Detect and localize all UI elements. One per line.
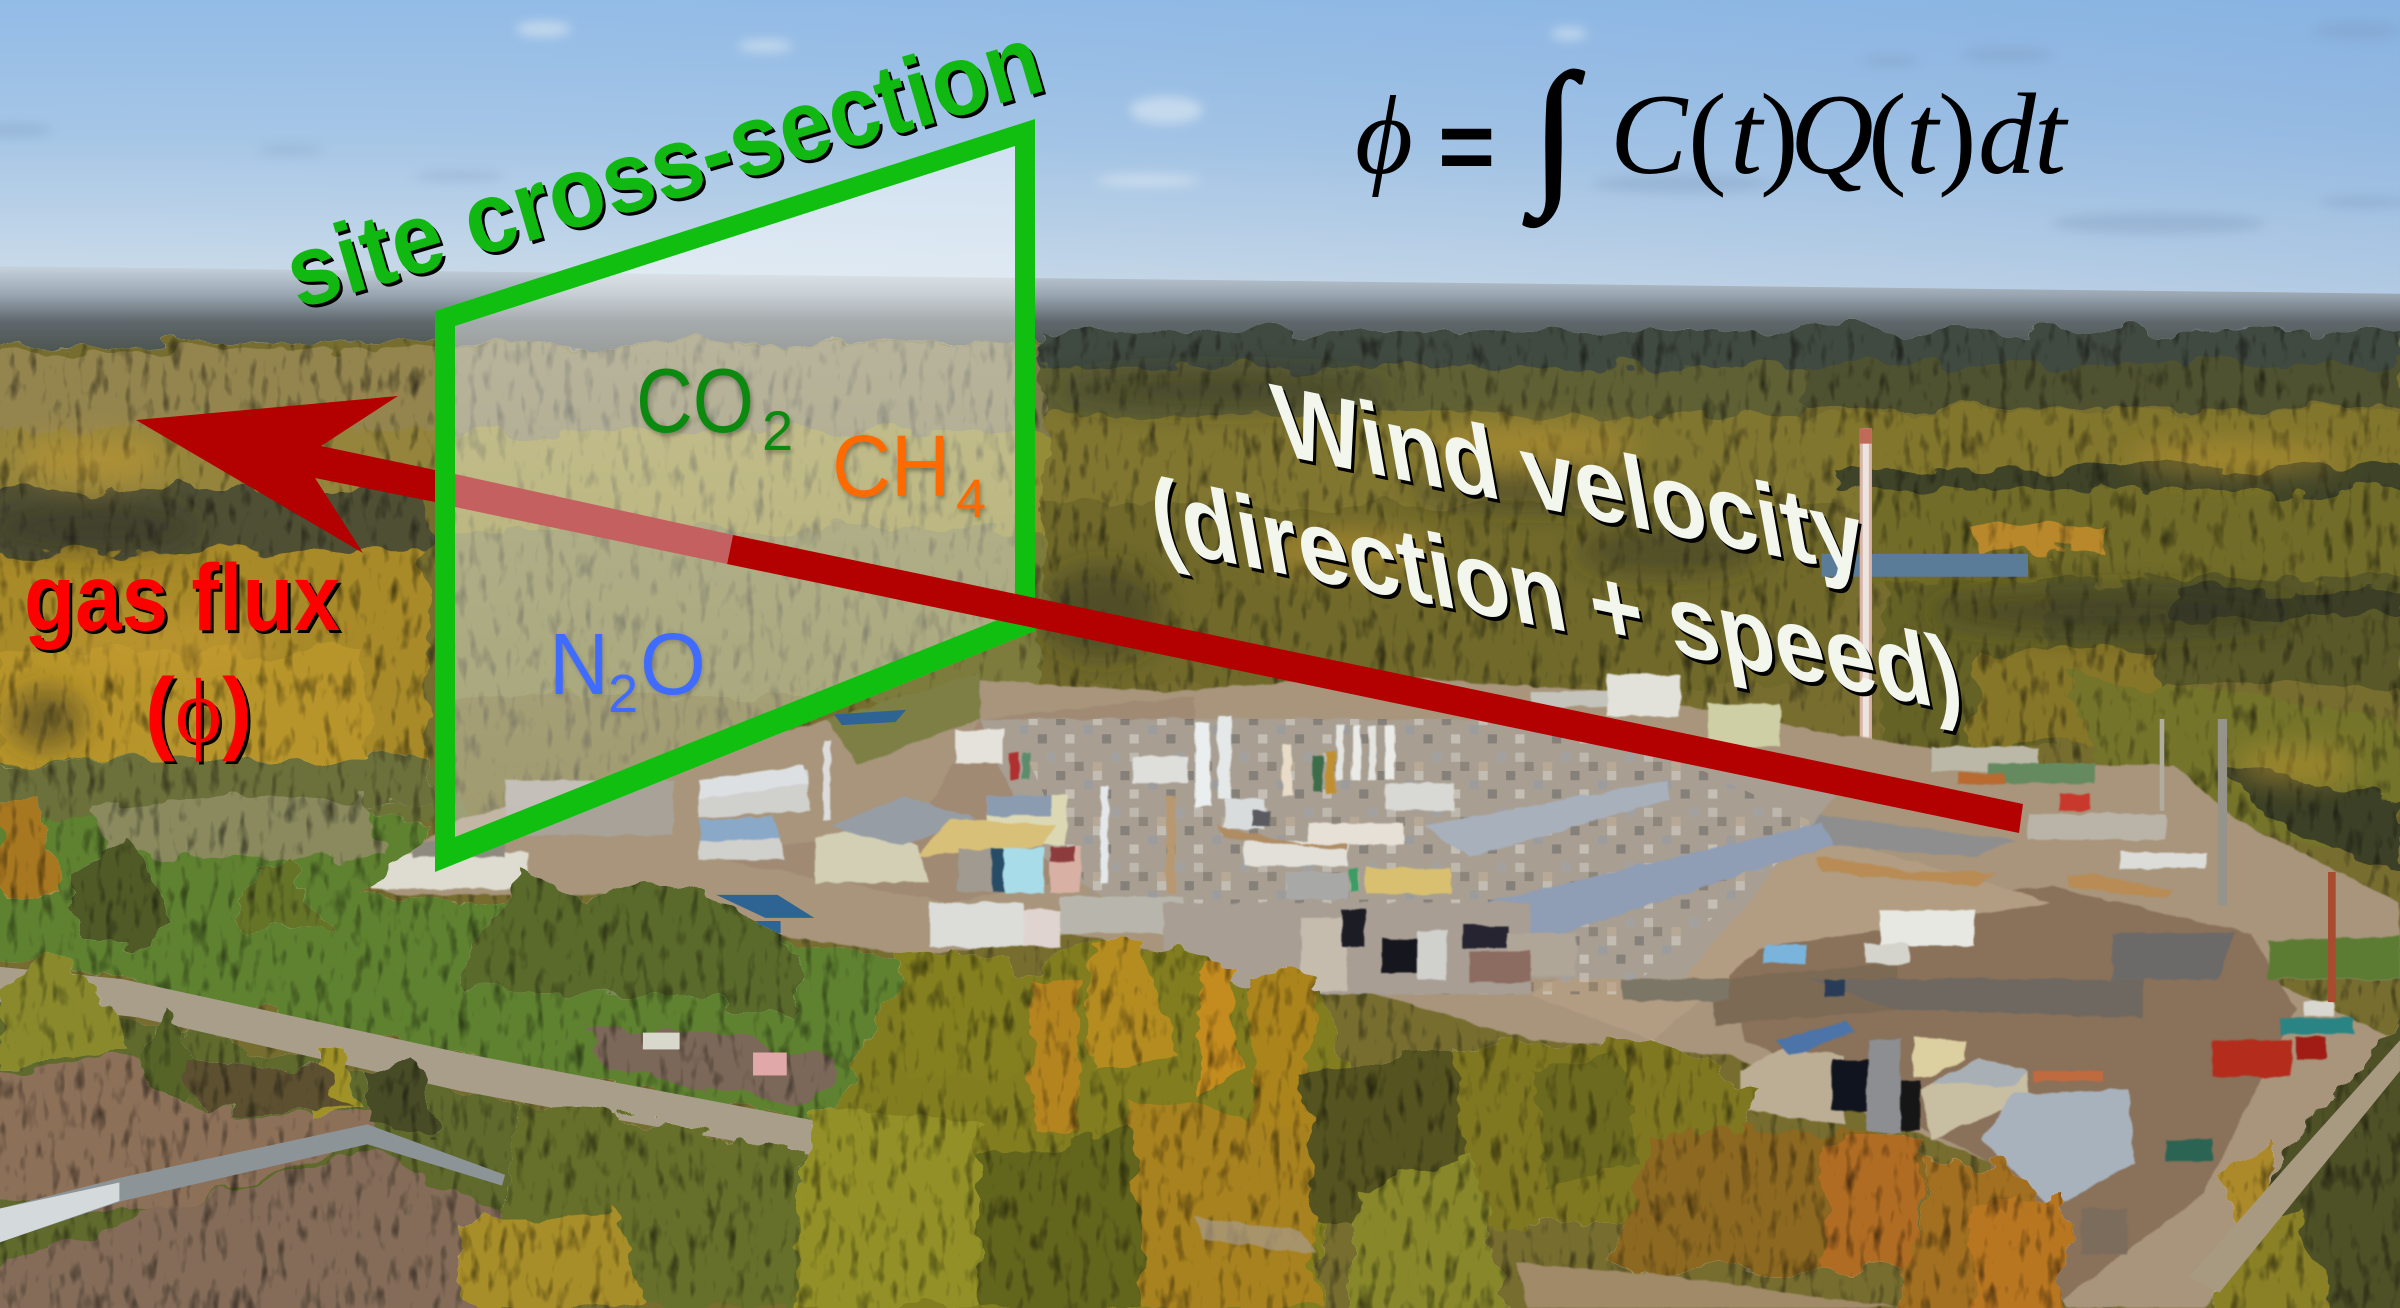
formula: ( [1688,71,1727,199]
translucent section fill [435,119,1035,872]
arrow shaft solid [727,535,2023,833]
lawn, road and dirt [0,757,937,1308]
label: wind velocity: Wind velocity [1264,361,1873,597]
ponds [716,710,906,933]
arrow shaft behind translucent section [455,474,733,564]
arrow head [136,396,435,553]
helipad markers [643,1033,787,1075]
formula: ϕ [1355,74,1413,198]
industrial site ground [360,673,2400,1308]
lower roads [1194,1216,1898,1308]
formula: d [1978,71,2037,199]
site block texture [1010,719,1821,994]
formula: ( [1868,71,1907,199]
label: CO2: CO [636,351,754,452]
label: gas flux: gas flux [24,545,340,651]
flare stack [1860,428,1872,768]
label: site cross-section: site cross-section [273,4,1055,330]
formula: t [1906,71,1941,199]
refinery buildings and equipment [372,675,2400,1254]
thin poles [2160,719,2336,1002]
formula: ∫ [1523,41,1584,227]
label: N2O: O [640,616,706,713]
formula: ) [1760,71,1799,199]
gravel road [0,967,819,1157]
red wind arrow [136,396,2023,833]
label: CH4: 4 [956,469,986,529]
forest background [0,330,2400,1308]
formula: t [1730,71,1765,199]
green frame outline [435,119,1035,872]
distant forest and horizon [0,266,2400,367]
formula: C [1610,71,1689,199]
label: CH4: CH [832,418,950,515]
label: CO2: 2 [762,399,793,462]
site cross-section frame [435,119,1035,872]
label: N2O: 2 [608,664,638,724]
label: phi symbol: (ϕ) [145,660,252,762]
pipeline at lower left [0,1124,505,1242]
label: N2O: N [549,616,609,713]
formula: Q [1790,71,1874,199]
lake [1821,554,2028,577]
formula [1355,41,2069,227]
sky with clouds [0,0,2400,306]
formula: ) [1938,71,1977,199]
formula: t [2034,71,2069,199]
formula: = [1438,91,1495,201]
label: wind velocity: (direction + speed) [1140,454,1970,735]
trees [0,803,2400,1308]
forest light and dark patches [0,372,2357,783]
right diagonal access road [2189,1040,2400,1293]
label: N2O [549,616,706,724]
